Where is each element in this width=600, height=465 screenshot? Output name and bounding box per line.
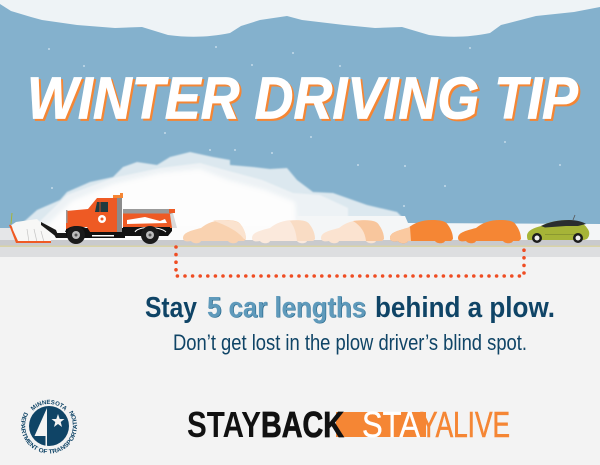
logo: stay back stay alive [187,404,510,445]
cab [66,198,118,232]
snowplow truck [9,193,177,244]
plow mount [41,222,58,235]
logo: stay back stay alive: STA [362,404,420,445]
left snowbank [0,228,30,240]
wheels [67,226,85,244]
dump bed [123,213,176,228]
sky background [0,0,600,240]
ghost car 4 [390,220,453,243]
headline: 5 car lengths [208,293,367,325]
ghost car 3 [321,220,384,243]
headline [145,292,555,325]
chassis [66,228,172,238]
dotted following distance bracket [176,247,524,276]
snowbank horizon [297,216,600,240]
logo: stay back stay alive: YALIVE [420,404,510,445]
logo: Minnesota Department of Transportation: DEPARTMENT OF TRANSPORTATION [21,410,78,454]
front fender [65,226,90,232]
snow under cars [30,226,300,240]
logo: stay back stay alive: STAY [187,404,261,445]
headline: 5 car lengths [207,292,366,324]
green car [527,215,589,243]
snow clouds at top [0,0,600,37]
road [0,240,600,257]
ghost car 1 [183,220,246,243]
ghost car 2 [252,220,315,243]
faded car silhouettes [183,220,521,243]
snowy foreground [0,257,600,465]
subheading: Don’t get lost in the plow driver’s blind spot. [173,330,527,355]
logo: stay back stay alive: BACK [261,404,344,445]
orange car 5 [458,220,521,243]
falling snow specks [48,46,561,207]
headline: Stay [145,292,197,324]
logo: Minnesota Department of Transportation: MINNESOTA [30,400,66,411]
headline: behind a plow. [375,292,555,324]
snow plume behind plow [17,152,405,240]
plow blade [10,219,51,242]
